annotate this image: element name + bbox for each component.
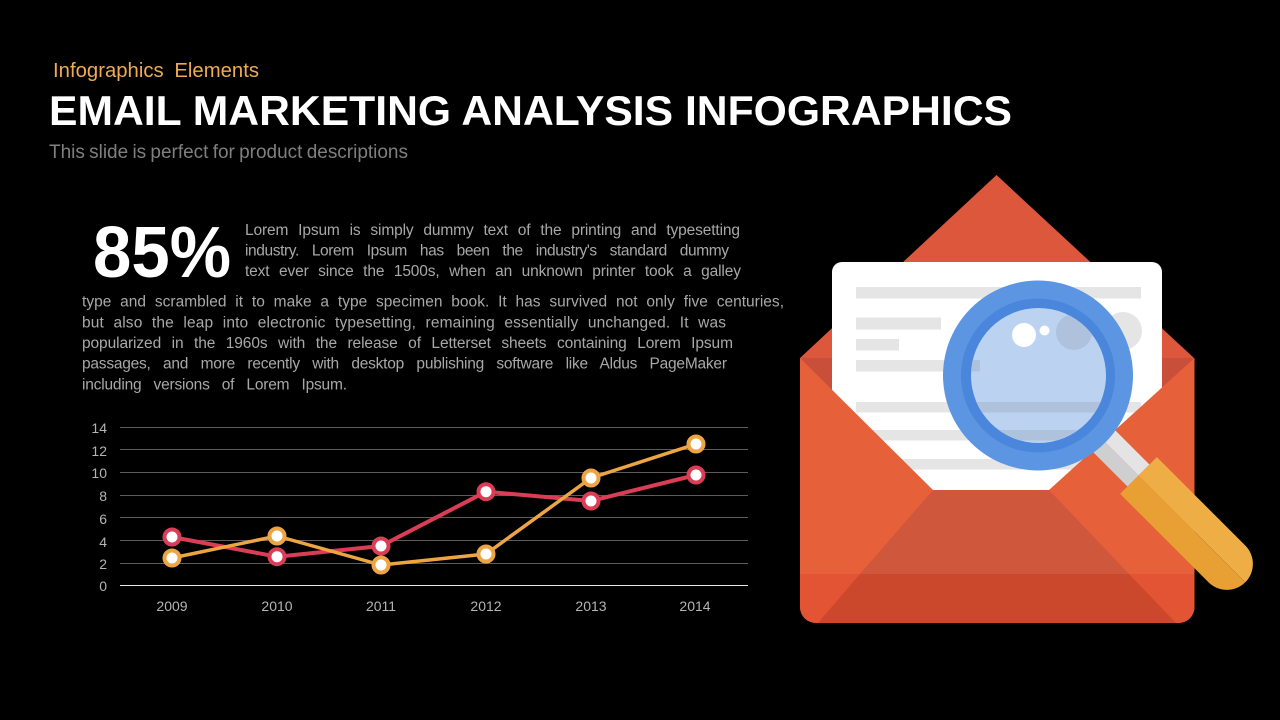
magnifier lens <box>971 308 1106 443</box>
subtitle: This slide is perfect for product descriptions <box>49 142 408 163</box>
magnifier ring <box>943 280 1133 470</box>
envelope bottom band <box>800 574 1194 623</box>
letter paper <box>832 262 1162 500</box>
orange data series <box>164 436 704 572</box>
body text block: including versions of Lorem Ipsum. <box>82 376 347 394</box>
x axis labels <box>156 598 711 614</box>
y axis labels: 6 <box>99 511 107 527</box>
body text block: text ever since the 1500s, when an unknown printer took a galley <box>245 263 741 280</box>
x axis labels: 2011 <box>366 598 396 614</box>
title: EMAIL MARKETING ANALYSIS INFOGRAPHICS <box>49 87 1012 134</box>
body text block: Lorem Ipsum is simply dummy text of the printing and typesetting <box>245 222 740 239</box>
lens details <box>971 315 1100 440</box>
x axis labels: 2014 <box>679 598 711 614</box>
body text block: passages, and more recently with desktop publishing software like Aldus PageMaker <box>82 356 727 372</box>
icon: magnifying glass <box>943 280 1264 601</box>
y axis labels: 14 <box>91 420 107 436</box>
y axis labels: 10 <box>91 465 107 481</box>
body text block <box>82 222 784 394</box>
y axis labels <box>91 420 107 594</box>
body text block: industry. Lorem Ipsum has been the industry's standard dummy <box>245 242 729 260</box>
envelope centre fold <box>860 490 1129 574</box>
icon: envelope with letter <box>800 175 1194 623</box>
red data series <box>164 468 704 564</box>
envelope inner shadow <box>800 358 1194 500</box>
y axis labels: 4 <box>99 534 107 550</box>
y axis labels: 12 <box>91 443 107 459</box>
body text block: type and scrambled it to make a type specimen book. It has survived not only five centuries, <box>82 294 784 310</box>
line chart <box>91 420 748 614</box>
body text block: popularized in the 1960s with the release of Letterset sheets containing Lorem Ipsum <box>82 335 733 352</box>
envelope centre fold lower <box>818 574 1176 623</box>
x axis labels: 2009 <box>156 598 188 614</box>
y axis labels: 8 <box>99 488 107 504</box>
x axis labels: 2010 <box>261 598 293 614</box>
y axis labels: 0 <box>99 578 107 594</box>
y axis labels: 2 <box>99 556 107 572</box>
body text block: but also the leap into electronic typesetting, remaining essentially unchanged. It was <box>82 314 726 332</box>
x axis labels: 2013 <box>575 598 607 614</box>
envelope back flap <box>800 175 1194 358</box>
magnifier metal neck <box>1078 415 1149 486</box>
big stat: 85%: 85% <box>93 213 231 293</box>
eyebrow heading: Infographics Elements <box>53 60 259 82</box>
magnifier handle <box>1120 457 1264 601</box>
x axis labels: 2012 <box>470 598 502 614</box>
envelope front body <box>800 358 1194 623</box>
